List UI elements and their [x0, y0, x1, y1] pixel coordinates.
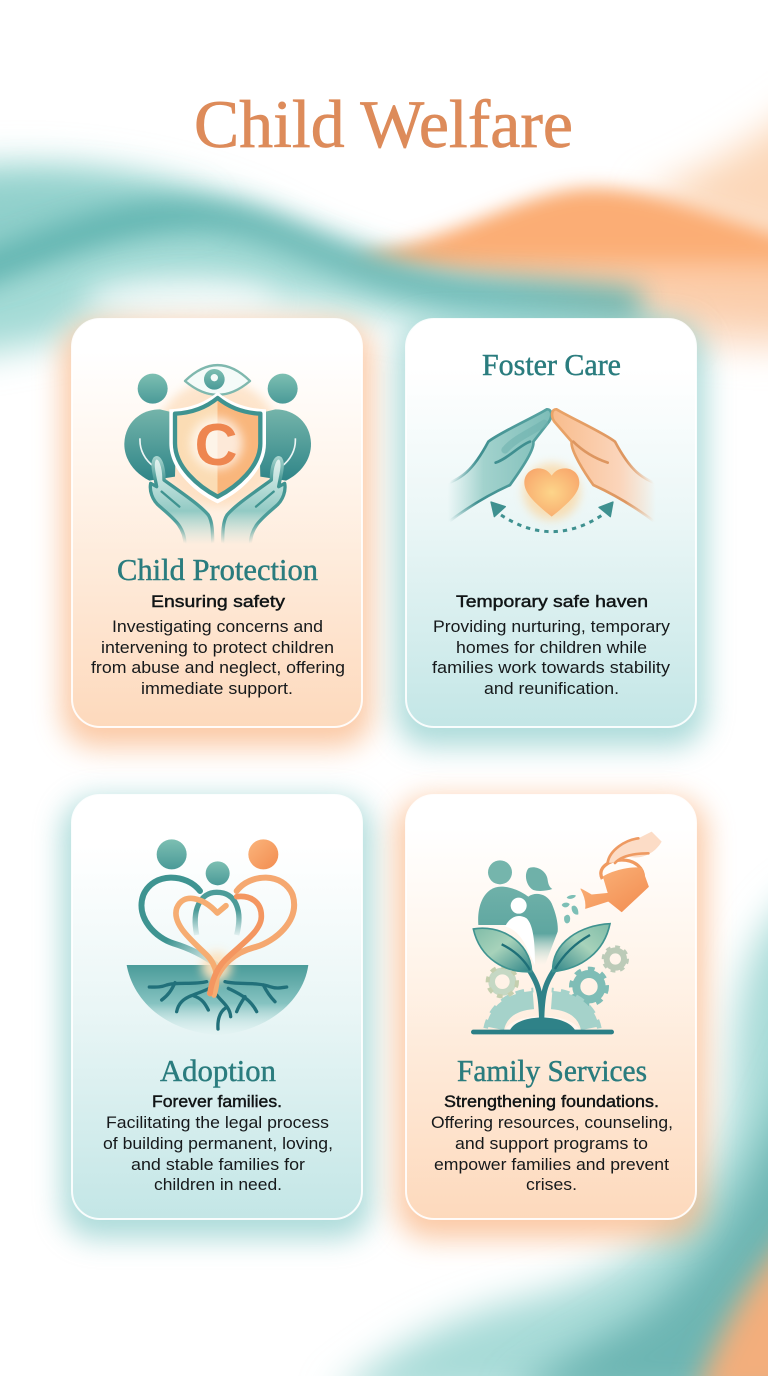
text: foster care description	[432, 617, 671, 698]
text: child protection description: Investigating concerns and	[112, 617, 323, 636]
title: Child Welfare	[194, 86, 573, 162]
text: adoption description: Forever families.	[152, 1092, 282, 1111]
text: family services description: Strengthening foundations.	[444, 1092, 659, 1111]
text: adoption description: of building permanent, loving,	[103, 1134, 333, 1153]
text: family services description: and support programs to	[455, 1134, 648, 1153]
text: family services description: crises.	[526, 1175, 577, 1194]
text: family services description	[431, 1092, 673, 1194]
heading: child protection: Child Protection	[117, 552, 318, 587]
text: foster care description: families work towards stability	[432, 658, 671, 677]
text: child protection description: intervening to protect children	[101, 638, 334, 657]
icon: shield, guardians, eye and hands	[124, 365, 311, 545]
heading: foster care: Foster Care	[482, 347, 621, 382]
icon: family hearts with roots	[127, 839, 308, 1035]
icon: shield, guardians, eye and hands: C	[195, 411, 237, 478]
text: foster care description: Providing nurturing, temporary	[433, 617, 671, 636]
panel: foster care	[396, 319, 706, 747]
heading: family services: Family Services	[457, 1053, 647, 1088]
text: adoption description: children in need.	[154, 1175, 282, 1194]
subheading: ensuring safety: Ensuring safety	[151, 592, 286, 611]
text: adoption description: Facilitating the legal process	[106, 1113, 329, 1132]
subheading: temporary safe haven: Temporary safe haven	[456, 592, 648, 611]
text: foster care description: homes for children while	[456, 638, 647, 657]
text: adoption description	[103, 1092, 333, 1194]
text: child protection description: from abuse and neglect, offering	[91, 658, 345, 677]
text: child protection description	[91, 617, 345, 698]
icon: family, sprout, gears and watering can	[473, 832, 662, 1032]
text: family services description: Offering resources, counseling,	[431, 1113, 673, 1132]
panel: family services	[396, 795, 706, 1239]
text: family services description: empower families and prevent	[434, 1155, 669, 1174]
panel: child protection	[62, 319, 372, 747]
text: foster care description: and reunification.	[484, 679, 619, 698]
heading: adoption: Adoption	[160, 1053, 276, 1088]
panel: adoption	[62, 795, 372, 1239]
icon: sheltering hands over heart	[438, 409, 665, 532]
text: child protection description: immediate support.	[141, 679, 293, 698]
text: adoption description: and stable families for	[131, 1155, 305, 1174]
